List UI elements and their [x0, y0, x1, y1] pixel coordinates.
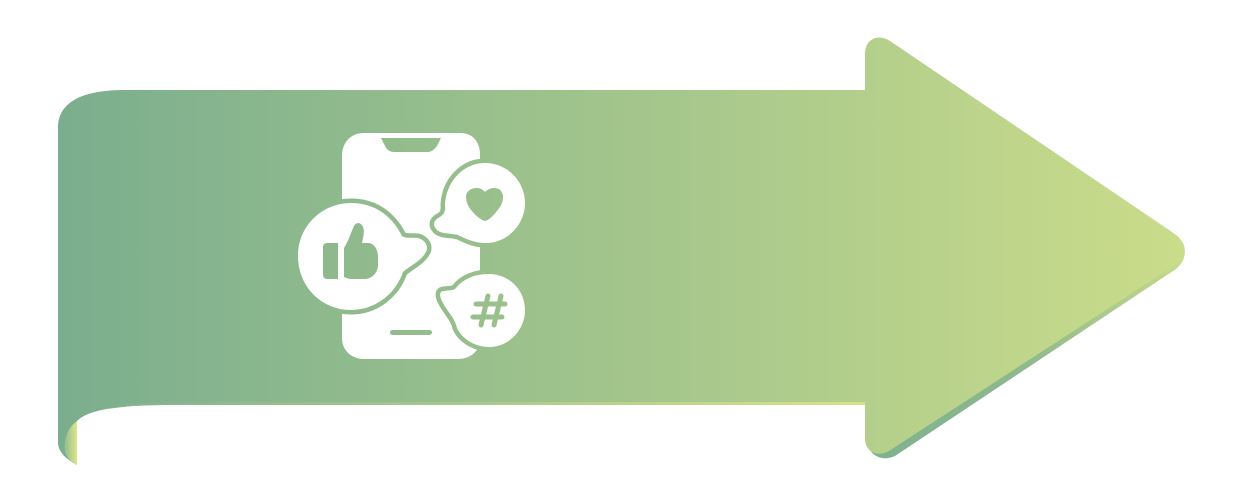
icon: phone home bar: [390, 330, 432, 335]
icon: smartphone with social reactions: [298, 133, 525, 359]
icon: hashtag speech bubble: [440, 274, 525, 347]
icon: thumb cuff: [323, 243, 338, 279]
ribbon curl underside: [65, 421, 77, 465]
arrowhead shadow edge: [870, 250, 1185, 458]
arrow body: [58, 37, 1185, 465]
icon: heart speech bubble: [434, 163, 525, 243]
icon: phone body: [342, 133, 480, 359]
icon: thumb hand: [344, 223, 378, 279]
shaft bottom highlight stripe: [108, 402, 865, 409]
icon: thumbs-up speech bubble: [298, 203, 427, 310]
icon: phone notch: [381, 138, 441, 152]
icon: heart: [466, 188, 503, 221]
icon: hash symbol: [473, 296, 505, 325]
